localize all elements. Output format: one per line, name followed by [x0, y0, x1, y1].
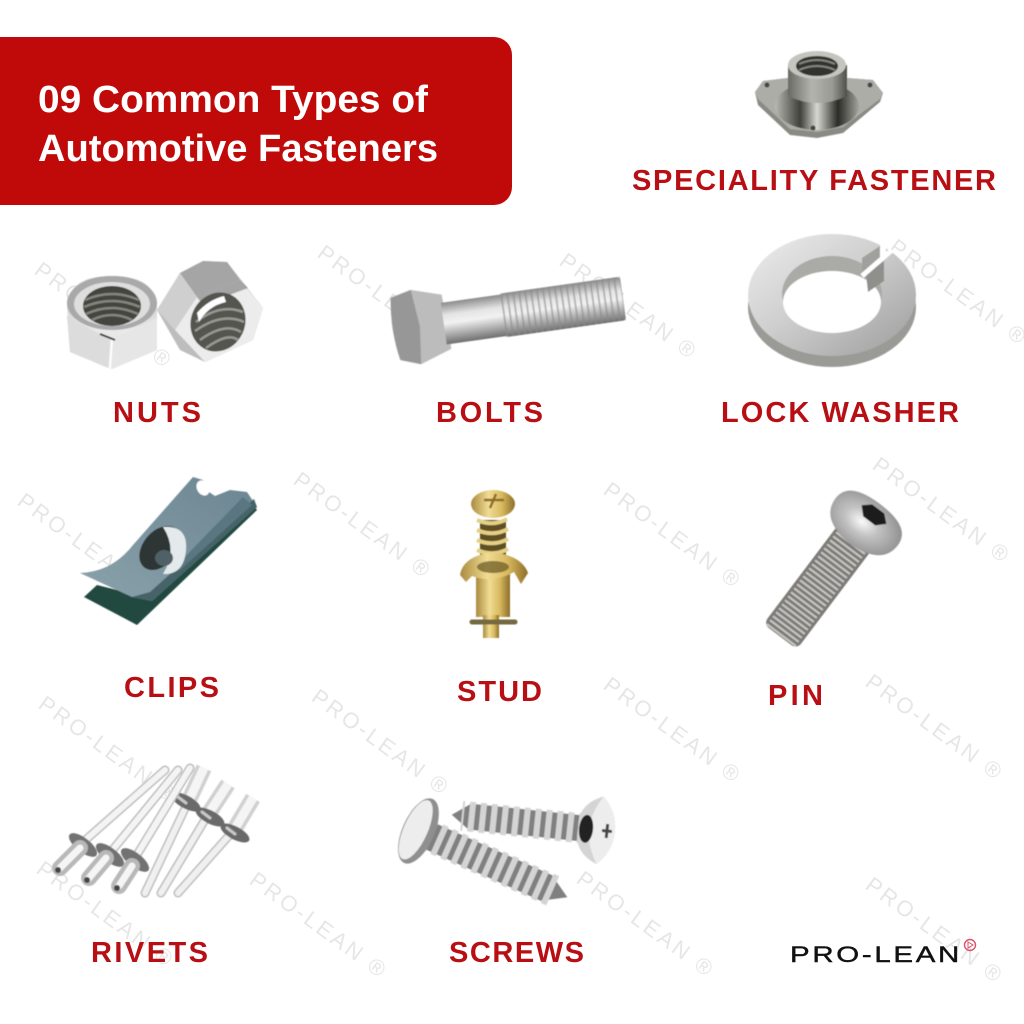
- icon: logo play mark: [964, 940, 976, 950]
- watermarks: PRO-LEAN ®: [555, 248, 703, 365]
- watermarks: PRO-LEAN ®: [861, 872, 1009, 989]
- label: lock washer: LOCK WASHER: [721, 397, 959, 429]
- icon: lock washer: [748, 233, 916, 367]
- watermarks: PRO-LEAN ®: [307, 684, 455, 801]
- watermarks: PRO-LEAN ®: [13, 488, 161, 605]
- watermarks: [13, 234, 1024, 989]
- watermarks: PRO-LEAN ®: [861, 669, 1009, 786]
- label: rivets: RIVETS: [91, 937, 208, 969]
- watermarks: PRO-LEAN ®: [289, 467, 437, 584]
- label: pin: PIN: [768, 680, 823, 712]
- label: speciality fastener: SPECIALITY FASTENER: [632, 165, 996, 197]
- icon: screws: [390, 781, 618, 929]
- icon: bolt: [388, 261, 628, 367]
- icon: rivets: [55, 768, 253, 893]
- watermarks: PRO-LEAN ®: [34, 691, 182, 808]
- icon: nuts: [67, 261, 263, 369]
- label: stud: STUD: [457, 676, 542, 708]
- watermarks: PRO-LEAN ®: [868, 452, 1016, 569]
- back screw: [448, 781, 618, 866]
- right nut: [157, 261, 263, 362]
- logo: [790, 940, 976, 967]
- watermarks: PRO-LEAN ®: [572, 866, 720, 983]
- watermarks: PRO-LEAN ®: [313, 240, 461, 357]
- front rivets: [55, 768, 190, 891]
- left nut: [67, 276, 157, 369]
- back rivets: [145, 768, 253, 893]
- watermarks: PRO-LEAN ®: [599, 672, 747, 789]
- icon: speciality fastener: [755, 51, 883, 138]
- watermarks: PRO-LEAN ®: [32, 856, 180, 973]
- icon: clip: [80, 477, 257, 625]
- watermarks: PRO-LEAN ®: [599, 477, 747, 594]
- label: screws: SCREWS: [449, 937, 584, 969]
- icon: stud: [460, 490, 528, 638]
- icon: pin: [749, 481, 911, 660]
- label: nuts: NUTS: [113, 397, 201, 429]
- label: bolts: BOLTS: [436, 397, 543, 429]
- watermarks: PRO-LEAN ®: [30, 257, 178, 374]
- title: 09 Common Types of: [38, 79, 428, 121]
- title: Automotive Fasteners: [38, 128, 438, 170]
- logo: PRO-LEAN: [790, 942, 962, 967]
- watermarks: PRO-LEAN ®: [245, 867, 393, 984]
- header banner: [0, 37, 512, 205]
- label: clips: CLIPS: [124, 672, 219, 704]
- front screw: [390, 792, 582, 929]
